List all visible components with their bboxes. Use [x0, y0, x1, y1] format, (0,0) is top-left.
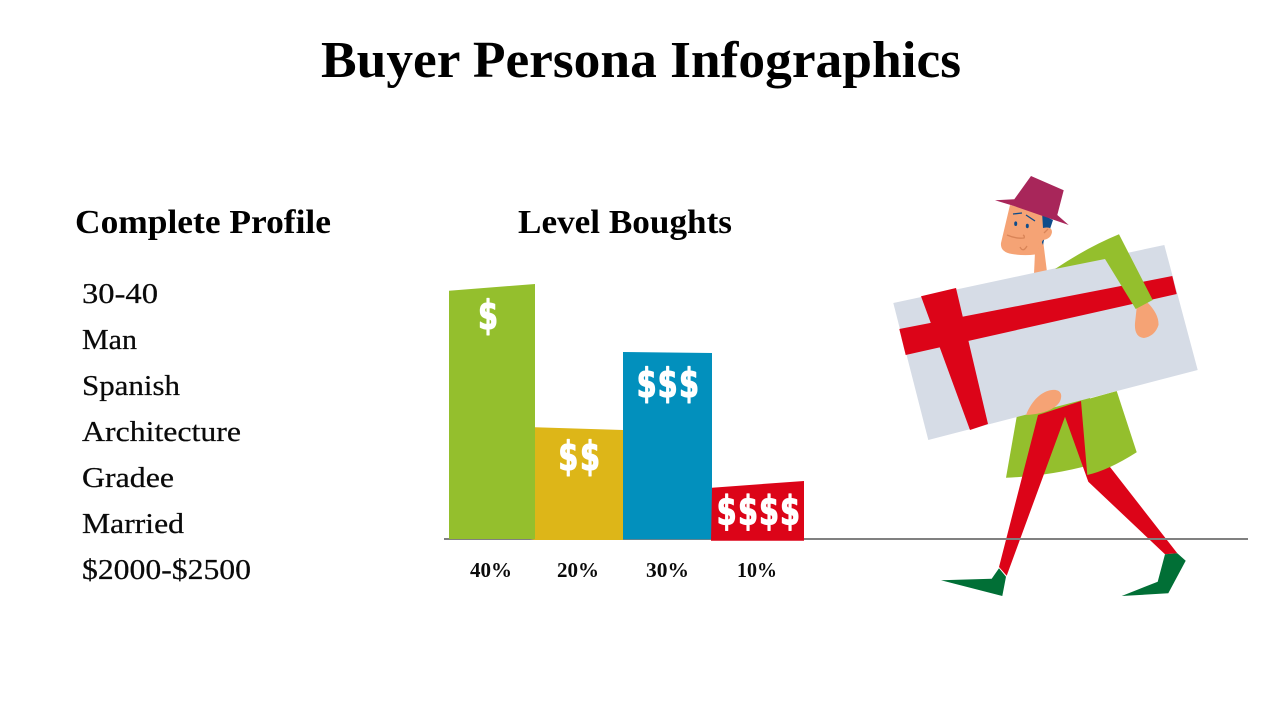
- legs: [999, 401, 1177, 576]
- percent labels: 30%: [646, 558, 689, 582]
- gift box: [893, 245, 1198, 440]
- bar chart: [449, 284, 804, 541]
- arm: [1055, 234, 1153, 309]
- profile list: Spanish: [82, 370, 181, 402]
- profile list: Man: [82, 324, 138, 356]
- hand right: [1135, 302, 1159, 338]
- bar 40%: [449, 284, 535, 539]
- percent labels: 20%: [557, 558, 599, 582]
- hat: [995, 176, 1069, 225]
- face details: [1007, 213, 1048, 250]
- bar 40%: $: [478, 293, 498, 339]
- illustration: man carrying gift: [893, 176, 1198, 596]
- shoe left: [941, 568, 1006, 596]
- profile list: Architecture: [82, 416, 241, 448]
- bar 10%: $: [717, 489, 737, 535]
- coat flap: [1081, 391, 1137, 475]
- title: Buyer Persona Infographics: [321, 32, 961, 89]
- neck: [1034, 240, 1047, 274]
- profile list: Married: [82, 508, 185, 540]
- percent labels: [470, 558, 777, 582]
- bar 10%: $: [780, 489, 800, 535]
- baseline: [444, 538, 1248, 540]
- bar 10%: [711, 481, 804, 541]
- profile list: [82, 278, 251, 586]
- shoe right: [1122, 553, 1186, 596]
- percent labels: 40%: [470, 558, 512, 582]
- bar 10%: $: [738, 489, 758, 535]
- head: [1001, 205, 1052, 255]
- bar 30%: $: [658, 361, 678, 407]
- gift ribbon: [899, 276, 1177, 430]
- heading: complete profile: Complete Profile: [75, 204, 331, 241]
- percent labels: 10%: [737, 558, 777, 582]
- profile list: $2000-$2500: [82, 554, 251, 586]
- bar 20%: $: [558, 434, 578, 480]
- profile list: 30-40: [82, 278, 158, 310]
- bar 30%: $: [637, 361, 657, 407]
- bar 20%: [530, 427, 623, 540]
- bar 20%: $: [580, 434, 600, 480]
- profile list: Gradee: [82, 462, 174, 494]
- hair: [1041, 214, 1053, 245]
- bar 30%: $: [679, 361, 699, 407]
- heading: level boughts: Level Boughts: [518, 204, 732, 241]
- bar 10%: $: [759, 489, 779, 535]
- bar 30%: [623, 352, 712, 539]
- hand left: [1026, 390, 1061, 415]
- coat lower left: [1006, 395, 1090, 478]
